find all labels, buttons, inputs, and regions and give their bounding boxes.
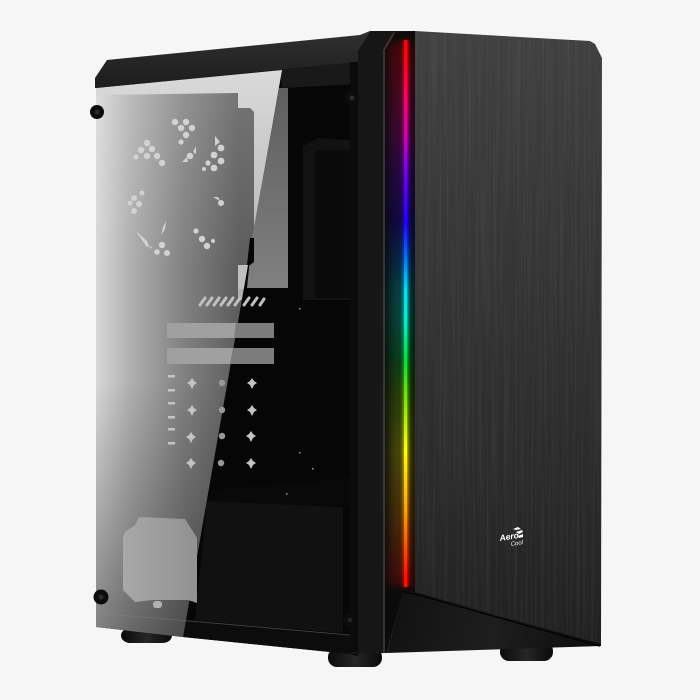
product image: PC tower case (90, 31, 602, 667)
RGB glow (389, 40, 413, 587)
AeroCool logo (498, 527, 524, 548)
glass reflection (90, 60, 290, 640)
fan plate and lower panel (96, 93, 270, 640)
bottom rail (183, 619, 350, 654)
LED bezel (385, 31, 415, 653)
foot: left (121, 628, 172, 643)
rear bracket (280, 62, 358, 88)
light strip (96, 70, 282, 300)
drive cage (303, 138, 350, 300)
inner frame rail (350, 62, 358, 652)
front frame column (350, 31, 415, 654)
front panel (415, 30, 603, 650)
bezel edge highlight (384, 33, 394, 653)
PSU cut-out (123, 517, 197, 603)
screw: top right (345, 91, 359, 105)
PSU shroud (195, 501, 343, 633)
logo leaves (513, 527, 523, 538)
plate notch (247, 238, 254, 265)
lower wedge (387, 592, 601, 653)
top lip (95, 31, 370, 88)
screw: bottom right (342, 612, 358, 628)
grey plate right of reflection (247, 88, 288, 288)
foot: centre (328, 648, 382, 667)
motherboard standoffs (168, 375, 257, 469)
interior specks (286, 308, 314, 494)
fan plate top light (115, 93, 254, 205)
RGB LED strip (404, 40, 407, 587)
shroud mesh strip (207, 478, 350, 506)
fan grille (128, 119, 224, 256)
screw: top left (90, 105, 104, 119)
expansion slots (167, 323, 274, 364)
case interior behind glass (96, 60, 358, 656)
AeroCool logo: Aero (498, 530, 519, 543)
brushed texture (415, 30, 603, 650)
tab below fan plate (238, 265, 248, 289)
PSU screw hole (153, 601, 162, 608)
screw: bottom left (94, 590, 108, 604)
AeroCool logo: Cool (510, 540, 524, 548)
panel bottom edge shadow (403, 592, 600, 646)
lower shading (96, 406, 218, 637)
bottom glass line (97, 613, 350, 635)
foot: right (500, 642, 553, 661)
vent slots (200, 298, 264, 305)
